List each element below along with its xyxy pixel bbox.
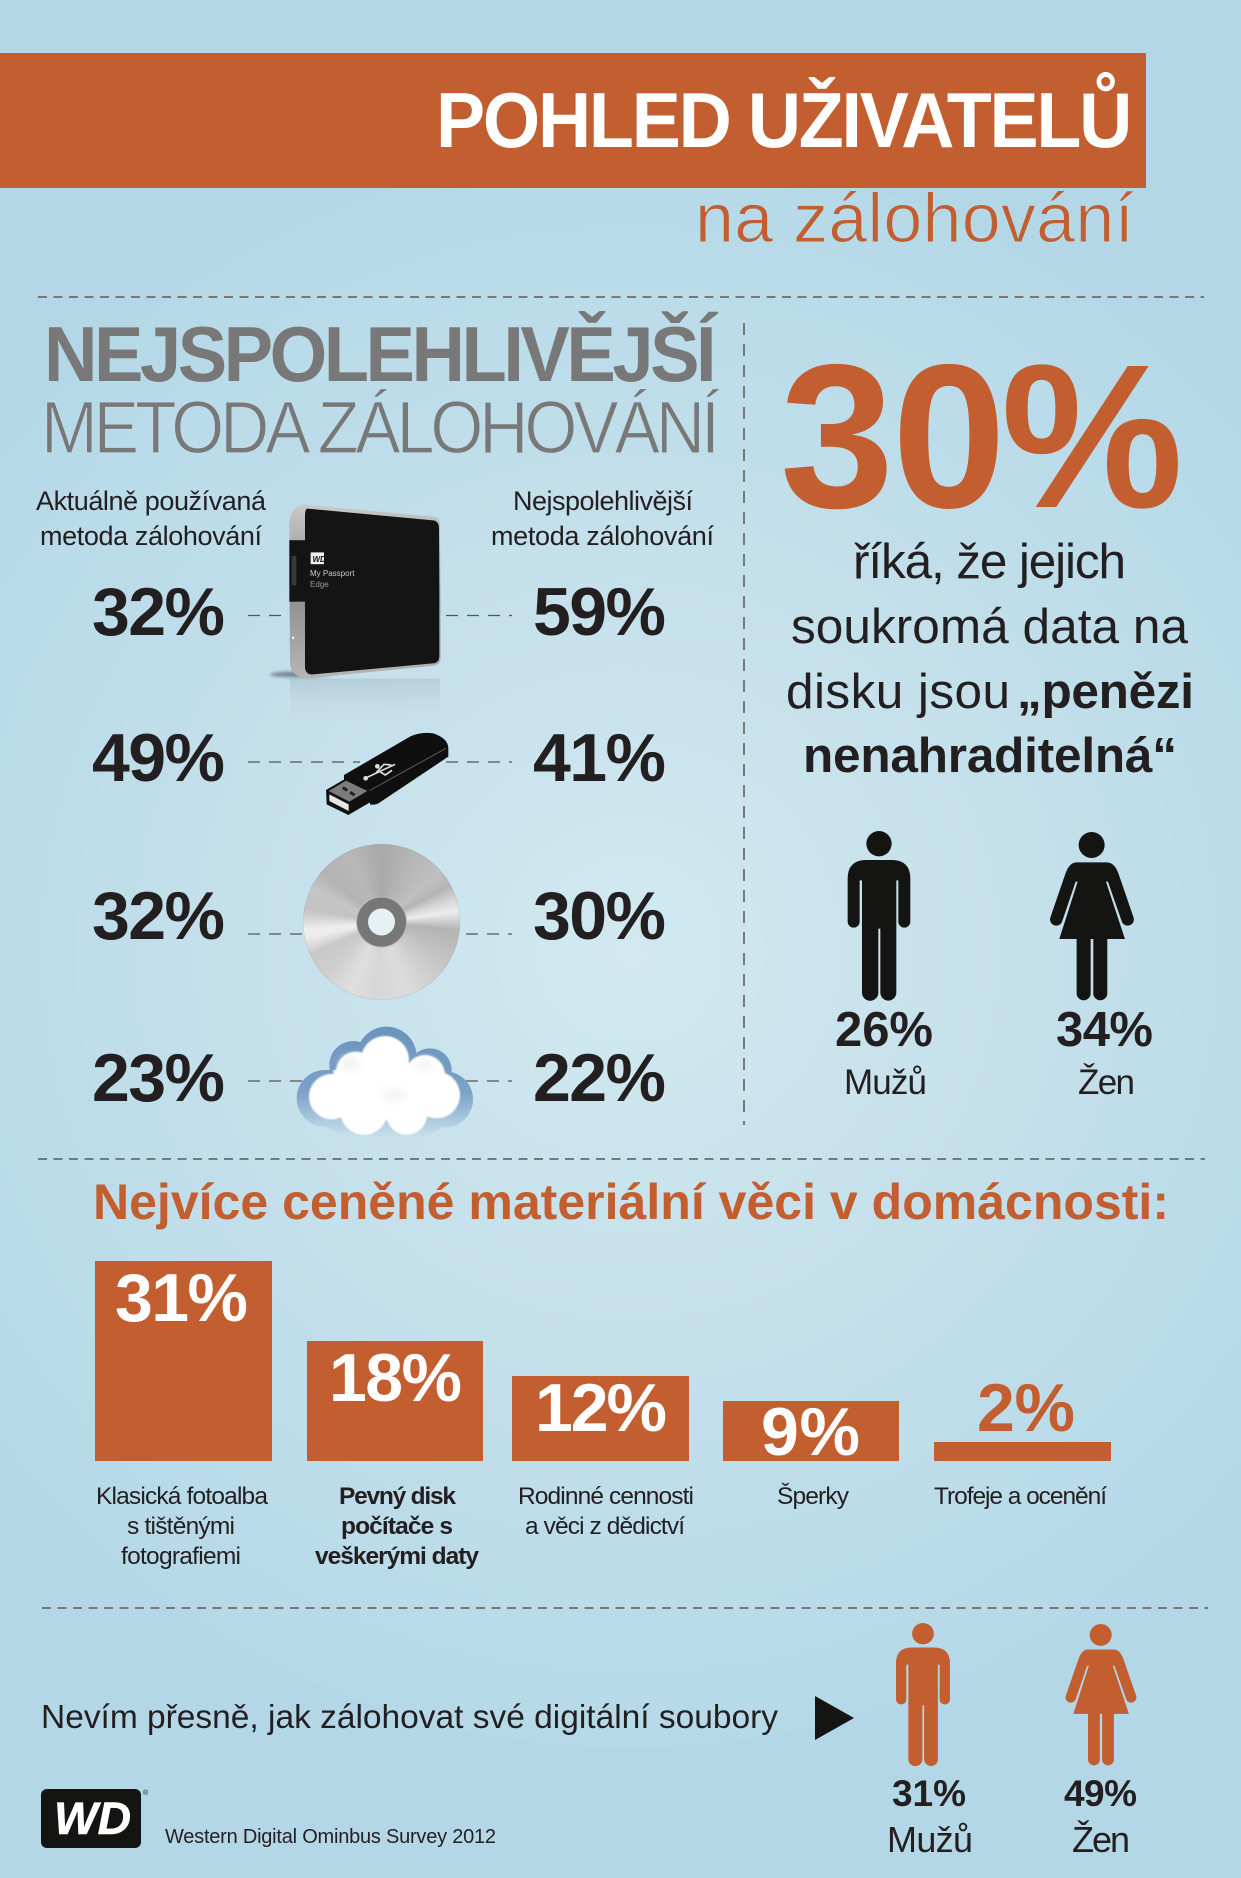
percentages row: USB: 41% xyxy=(533,720,666,796)
percentages row: external drive: 32% xyxy=(92,574,225,650)
connector lines xyxy=(248,616,512,1081)
icon: orange woman xyxy=(1065,1624,1136,1765)
logo: WD: WD xyxy=(54,1793,131,1844)
source note: Western Digital Ominbus Survey 2012 xyxy=(165,1826,496,1848)
icon: external hard drive: WD xyxy=(312,555,326,564)
panel: 30 percent statistic xyxy=(780,322,1194,1102)
column label: currently used: metoda zálohování xyxy=(40,521,262,551)
percentages row: cloud: 23% xyxy=(92,1040,225,1116)
bar: jewellery xyxy=(723,1394,899,1470)
statement text: nenahraditelná“ xyxy=(803,728,1177,783)
icon: external hard drive xyxy=(270,504,441,728)
title banner xyxy=(0,53,1146,188)
men label: Mužů xyxy=(844,1063,927,1102)
label: photo albums: s tištěnými xyxy=(127,1513,235,1540)
big number: 30 xyxy=(780,322,1006,551)
subtitle: na zálohování xyxy=(695,179,1135,257)
label: hard drive: počítače s xyxy=(341,1513,453,1540)
label: hard drive xyxy=(315,1483,479,1570)
percentages row: CD: 30% xyxy=(533,878,666,954)
bar: jewellery: 9% xyxy=(761,1394,860,1470)
heading: most reliable: NEJSPOLEHLIVĚJŠÍ xyxy=(44,310,718,398)
men percentage: 26% xyxy=(835,1003,933,1057)
column label: most reliable: Nejspolehlivější xyxy=(513,486,693,516)
column label: most reliable: metoda zálohování xyxy=(491,521,714,551)
icon: orange man xyxy=(896,1623,950,1766)
statement text: „penězi xyxy=(1017,664,1194,719)
label: photo albums xyxy=(96,1483,268,1570)
icon: external hard drive: Edge xyxy=(310,580,329,589)
women label: Žen xyxy=(1072,1819,1130,1860)
label: photo albums: Klasická fotoalba xyxy=(96,1483,268,1510)
column label: most reliable xyxy=(491,486,714,551)
women label: Žen xyxy=(1078,1063,1135,1102)
label: hard drive: veškerými daty xyxy=(315,1543,479,1570)
statement text: říká, že jejich xyxy=(853,534,1126,589)
big number: % xyxy=(1001,322,1183,551)
statement text: soukromá data na xyxy=(791,599,1188,654)
icon: woman xyxy=(1050,832,1134,1000)
bar: photo albums xyxy=(95,1260,272,1461)
percentages row: external drive xyxy=(92,574,666,650)
icon: cloud xyxy=(297,1027,473,1137)
heading: backup method: METODA ZÁLOHOVÁNÍ xyxy=(41,387,720,470)
women percentage: 49% xyxy=(1064,1773,1137,1814)
label: photo albums: fotografiemi xyxy=(121,1543,241,1570)
bar: heirlooms xyxy=(512,1370,689,1461)
callout: unsure how to back up: Nevím přesně, jak zálohovat své digitální soubory xyxy=(41,1699,778,1736)
percentages row: USB xyxy=(92,720,666,796)
percentages row: CD: 32% xyxy=(92,878,225,954)
logo: WD xyxy=(41,1789,149,1848)
bar: photo albums: 31% xyxy=(115,1260,248,1336)
label: trophies: Trofeje a ocenění xyxy=(934,1483,1107,1510)
icon: CD disc xyxy=(303,844,460,1000)
statement text: disku jsou xyxy=(786,664,1010,719)
bar chart: valued possessions xyxy=(95,1260,1111,1570)
logo: WD: ® xyxy=(143,1789,149,1797)
icon: external hard drive: My Passport xyxy=(310,569,355,578)
percentages row: USB: 49% xyxy=(92,720,225,796)
bar: trophies: 2% xyxy=(977,1370,1075,1446)
label: heirlooms xyxy=(518,1483,694,1540)
label: heirlooms: a věci z dědictví xyxy=(525,1513,685,1540)
percentages row: CD xyxy=(92,878,666,954)
women percentage: 34% xyxy=(1056,1003,1153,1057)
percentages row: cloud: 22% xyxy=(533,1040,666,1116)
heading: most valued possessions: Nejvíce ceněné materiální věci v domácnosti: xyxy=(93,1174,1169,1230)
icon: USB flash drive xyxy=(326,733,448,815)
column label: currently used: Aktuálně používaná xyxy=(36,486,267,516)
bar: hard drive: 18% xyxy=(329,1340,462,1416)
bar: hard drive xyxy=(307,1340,483,1461)
panel: reliable backup methods xyxy=(36,310,720,1137)
arrow xyxy=(815,1696,854,1740)
title: POHLED UŽIVATELŮ xyxy=(436,72,1132,164)
bar: trophies xyxy=(934,1370,1111,1461)
statement text xyxy=(786,534,1194,783)
column label: currently used xyxy=(36,486,267,551)
icon: man xyxy=(848,831,910,1001)
percentages row: external drive: 59% xyxy=(533,574,666,650)
men percentage: 31% xyxy=(892,1773,966,1814)
bar: heirlooms: 12% xyxy=(535,1370,667,1446)
label: jewellery: Šperky xyxy=(777,1482,850,1510)
percentages row: cloud xyxy=(92,1040,666,1116)
label: heirlooms: Rodinné cennosti xyxy=(518,1483,694,1510)
label: hard drive: Pevný disk xyxy=(339,1483,456,1510)
men label: Mužů xyxy=(887,1819,973,1860)
